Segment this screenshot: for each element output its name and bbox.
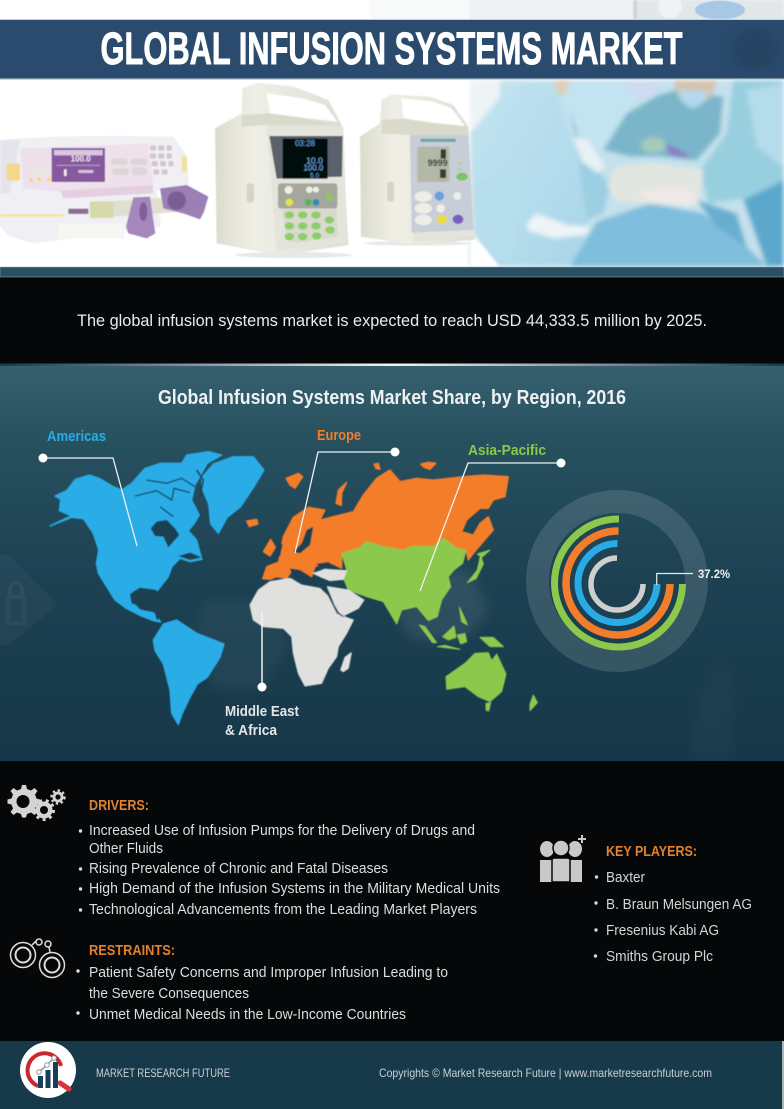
key players list: Baxter [606, 869, 645, 886]
key players list [594, 869, 752, 965]
lower image strip [0, 267, 784, 277]
callout: Middle East and Africa: & Africa [225, 723, 278, 739]
inland dark water and channels [130, 470, 203, 620]
Asia-Pacific [342, 538, 537, 711]
icon: gears [8, 785, 64, 820]
radial bar chart [538, 502, 730, 660]
drivers heading: DRIVERS: [89, 798, 149, 814]
callout: Middle East and Africa [225, 612, 299, 739]
surgical team photo [470, 80, 784, 267]
syringe pump [0, 136, 208, 243]
drivers list: High Demand of the Infusion Systems in the Military Medical Units [89, 880, 500, 897]
market forecast sentence: The global infusion systems market is expected to reach USD 44,333.5 million by 2025. [77, 311, 707, 330]
Europe and Russia [247, 462, 508, 579]
icon: handcuffs [10, 939, 64, 978]
company name: MARKET RESEARCH FUTURE [96, 1066, 230, 1080]
headline statistic panel [0, 278, 784, 364]
title band [0, 19, 784, 80]
small infusion pump: 9999 [428, 158, 448, 168]
small infusion pump [360, 94, 475, 246]
callout: Asia-Pacific [420, 443, 566, 591]
large infusion pump [215, 83, 352, 258]
drivers list: Rising Prevalence of Chronic and Fatal Diseases [89, 860, 388, 877]
drivers list: Technological Advancements from the Leading Market Players [89, 901, 477, 918]
callout: Europe [295, 428, 400, 553]
photo edge clean-up [470, 230, 500, 267]
logo [20, 1042, 76, 1098]
callout: Europe: Europe [317, 428, 361, 444]
top photo strip [370, 0, 784, 20]
icon: people group [540, 835, 586, 882]
copyright: Copyrights © Market Research Future | www.marketresearchfuture.com [379, 1066, 712, 1080]
restraints list: Unmet Medical Needs in the Low-Income Countries [89, 1006, 406, 1023]
drivers list [79, 822, 500, 918]
key players list: B. Braun Melsungen AG [606, 896, 752, 913]
restraints list [76, 964, 448, 1023]
restraints list: Patient Safety Concerns and Improper Infusion Leading to [89, 964, 448, 981]
inland dark water: seas [275, 527, 334, 579]
panel: market share by region [0, 364, 784, 761]
panel: drivers, restraints, key players [0, 761, 784, 1041]
callout: Middle East and Africa: Middle East [225, 704, 299, 720]
callout: Americas [38, 429, 137, 546]
large infusion pump: 100.0 [303, 164, 324, 173]
world map [50, 452, 537, 725]
callout: Asia-Pacific: Asia-Pacific [468, 443, 546, 459]
large infusion pump: 5.0 [310, 172, 320, 179]
footer [0, 1041, 784, 1109]
hero image panel [0, 0, 784, 270]
leader line and value [657, 574, 693, 585]
Americas [50, 452, 264, 725]
syringe pump: 100.0 [71, 154, 91, 163]
callout: Americas: Americas [47, 429, 106, 445]
large infusion pump: 03:28 [295, 139, 316, 148]
drivers list: Other Fluids [89, 840, 163, 857]
restraints heading: RESTRAINTS: [89, 943, 175, 959]
key players list: Smiths Group Plc [606, 948, 713, 965]
key players list: Fresenius Kabi AG [606, 922, 719, 939]
Middle East and Africa [250, 569, 364, 686]
section heading: Global Infusion Systems Market Share, by Region, 2016 [158, 387, 626, 409]
radial bar chart: 37.2% [698, 569, 730, 581]
restraints list: the Severe Consequences [89, 985, 249, 1002]
decorative background hexagons [0, 555, 735, 761]
key players heading: KEY PLAYERS: [606, 844, 697, 860]
drivers list: Increased Use of Infusion Pumps for the Delivery of Drugs and [89, 822, 475, 839]
large infusion pump: 10.0 [306, 155, 323, 165]
